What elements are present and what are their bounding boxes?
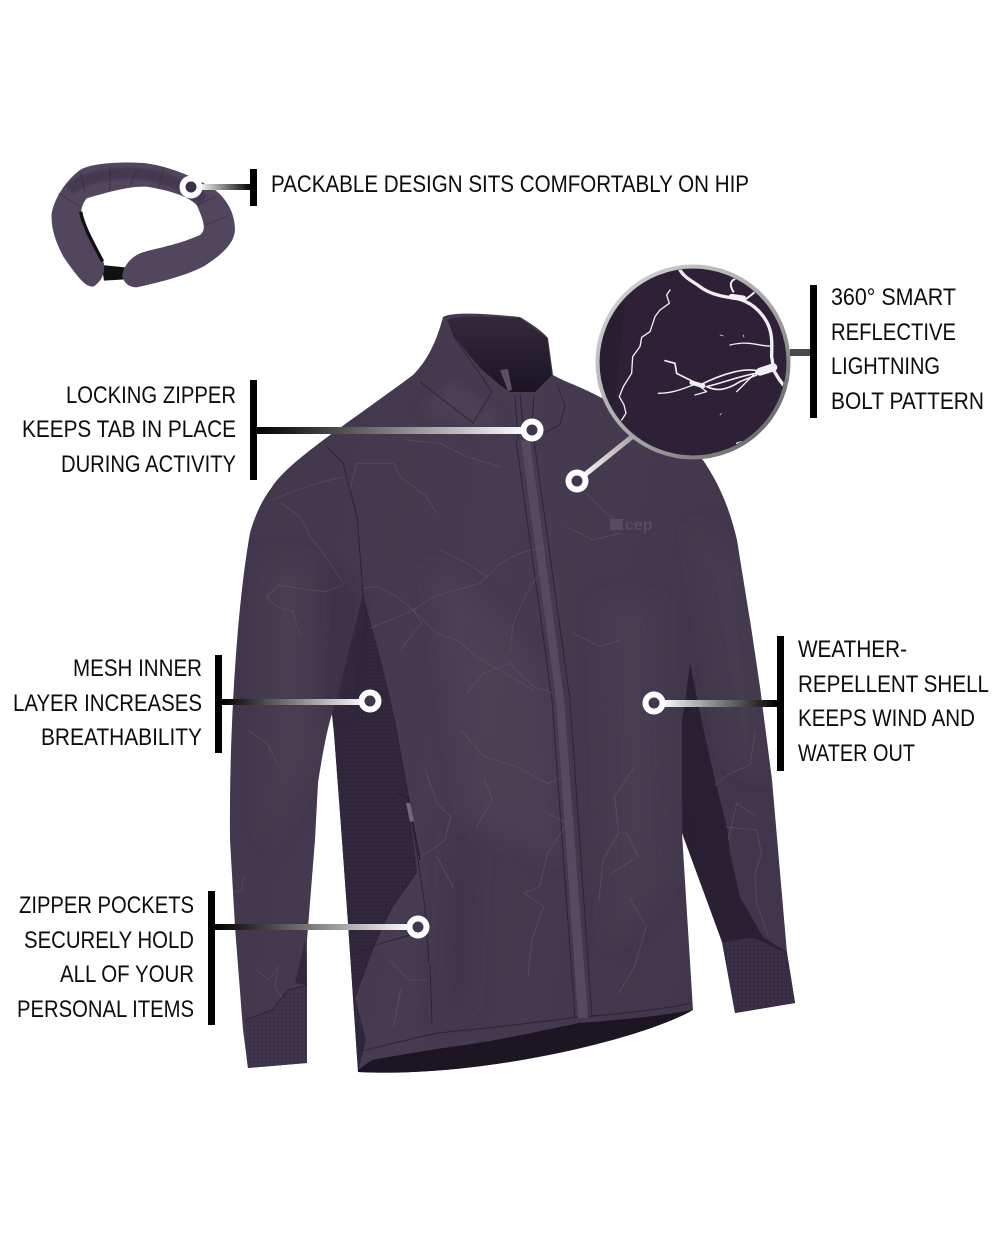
label: PERSONAL ITEMS [17, 996, 194, 1023]
leader line [660, 700, 778, 707]
leader line [222, 699, 366, 705]
label: WEATHER- [798, 636, 907, 663]
label: BREATHABILITY [41, 724, 202, 751]
leader line [198, 184, 251, 190]
marker [410, 918, 426, 936]
marker [182, 178, 200, 196]
chest logo [610, 519, 652, 534]
soft highlights and folds [741, 566, 750, 620]
label: LIGHTNING [831, 353, 940, 380]
callout: locking zipper [22, 380, 540, 480]
label: DURING ACTIVITY [61, 451, 236, 478]
lightning pattern, upper [267, 440, 620, 693]
label: LOCKING ZIPPER [66, 382, 236, 409]
label: PACKABLE DESIGN SITS COMFORTABLY ON HIP [271, 171, 749, 198]
right sleeve cracks [715, 733, 768, 937]
right side mesh panel [682, 663, 795, 1013]
lining at hem [350, 1010, 693, 1078]
right sleeve cuff [722, 937, 796, 1014]
bar [215, 655, 222, 753]
jacket illustration [220, 300, 810, 1090]
bar [250, 169, 257, 206]
label: ALL OF YOUR [60, 961, 194, 988]
packable neck roll [52, 162, 235, 287]
label [22, 382, 236, 478]
label [17, 892, 194, 1023]
left side mesh panel [332, 593, 417, 1072]
main zipper [521, 440, 588, 1018]
leader line [215, 924, 413, 930]
magnified lens [598, 266, 788, 458]
label [13, 655, 202, 751]
marker [646, 694, 662, 712]
leader line [257, 427, 527, 434]
callout: weather-repellent shell [646, 636, 989, 771]
label: ZIPPER POCKETS [19, 892, 194, 919]
label: 360° SMART [831, 284, 956, 311]
callout: lightning bolt pattern [568, 266, 984, 490]
callout: mesh inner layer [13, 655, 378, 753]
callout: zipper pockets [17, 891, 426, 1025]
marker [524, 422, 540, 438]
chest logo: cep [625, 517, 653, 534]
label: WATER OUT [798, 740, 915, 767]
bar [250, 380, 257, 480]
label [798, 636, 989, 767]
left sleeve cuff [246, 1054, 306, 1068]
callout: packable design [182, 169, 749, 206]
marker [568, 472, 586, 490]
label: REFLECTIVE [831, 319, 956, 346]
label: KEEPS TAB IN PLACE [22, 416, 236, 443]
label [831, 284, 984, 415]
left cuff cracks [233, 877, 282, 997]
label: KEEPS WIND AND [798, 705, 975, 732]
lightning pattern, lower [247, 730, 646, 1027]
bar [810, 285, 817, 418]
side pocket zipper [398, 793, 420, 860]
leader line from marker to lens [577, 436, 633, 481]
collar inner [447, 317, 552, 392]
label: MESH INNER [73, 655, 202, 682]
connector to bar [790, 349, 811, 356]
label: SECURELY HOLD [24, 927, 194, 954]
marker [362, 692, 378, 710]
bar [777, 636, 784, 771]
seams [420, 335, 492, 423]
label: LAYER INCREASES [13, 690, 202, 717]
bar [208, 891, 215, 1025]
